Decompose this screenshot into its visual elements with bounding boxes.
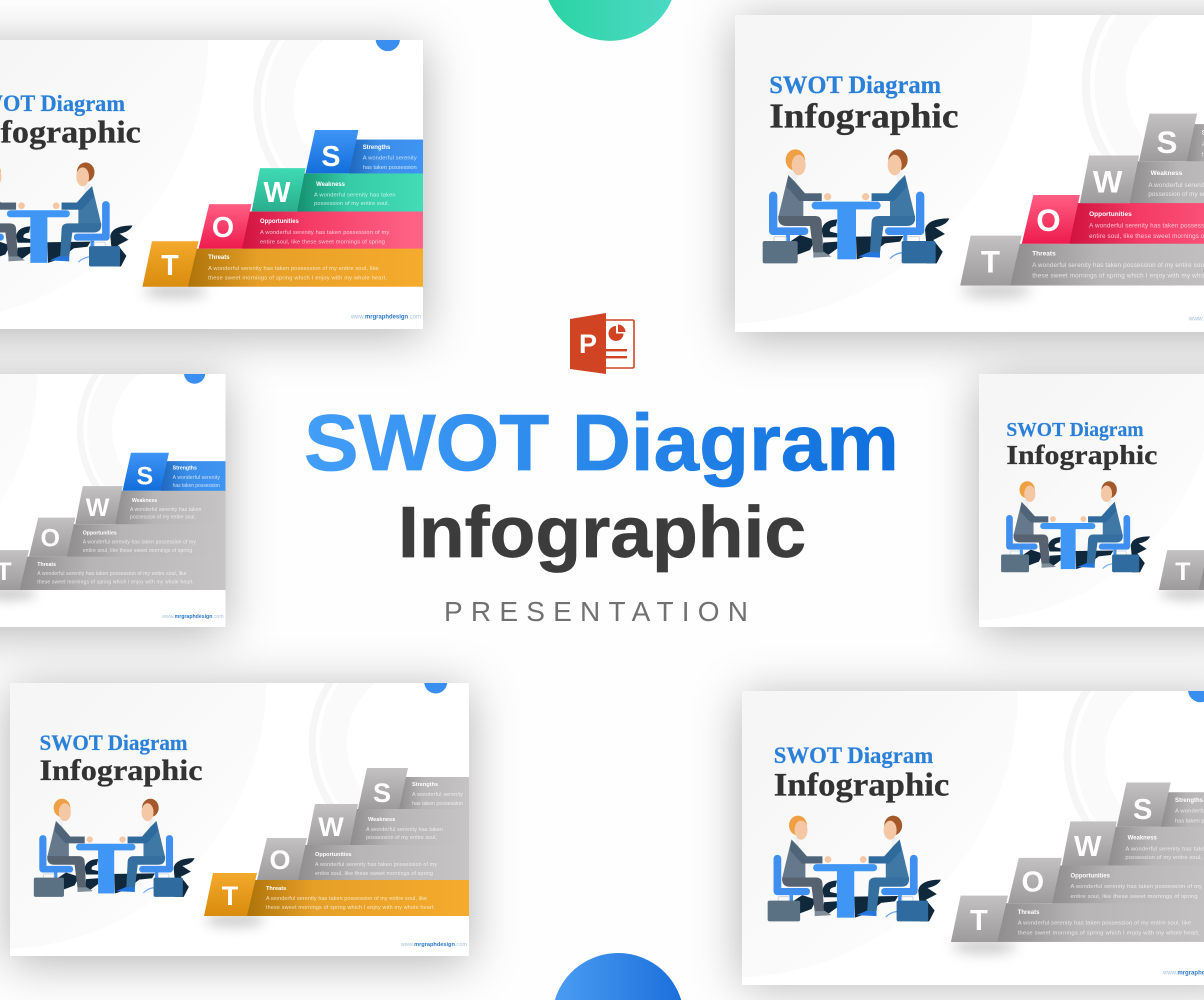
SWOT staircase: A wonderful serenity has taken possession of my [1070, 884, 1202, 890]
panel: slide middle right [979, 374, 1204, 627]
SWOT staircase: T [222, 881, 239, 911]
SWOT staircase: Threats [1032, 250, 1056, 257]
slide title [1006, 419, 1157, 471]
SWOT staircase: these sweet mornings of spring which I enjoy with my whole heart. [266, 905, 435, 911]
SWOT staircase: entire soul, like these sweet mornings of spring [83, 548, 192, 554]
website: www.mrgraphdesign.com [162, 614, 224, 620]
SWOT staircase: possession of my entire soul, [1125, 855, 1202, 861]
SWOT staircase: W [318, 812, 344, 842]
panel: slide bottom right, all grey [742, 691, 1204, 985]
SWOT staircase: A wonderful serenity [363, 156, 417, 162]
slide title: Infographic [1006, 440, 1157, 471]
slide title: Infographic [40, 754, 202, 787]
SWOT staircase [0, 453, 225, 590]
SWOT staircase: Threats [1018, 910, 1040, 916]
SWOT staircase: S [137, 462, 153, 490]
panel: slide middle left, strengths highlighted [0, 374, 226, 627]
SWOT staircase: has taken possession [363, 165, 417, 171]
SWOT staircase [142, 130, 423, 287]
icon: PowerPoint logo: P [579, 329, 597, 359]
SWOT staircase: Opportunities [260, 219, 300, 225]
tile shadow [1160, 587, 1204, 600]
decorative circle: top green [548, 0, 672, 41]
T tile [1159, 550, 1204, 590]
SWOT staircase: W [1093, 165, 1123, 200]
slide title [769, 70, 958, 136]
SWOT staircase: has taken possession [173, 483, 220, 489]
SWOT staircase: S [1156, 125, 1177, 160]
SWOT staircase [960, 114, 1204, 286]
SWOT staircase: W [1074, 831, 1102, 863]
SWOT staircase: A wonderful serenity has taken possession of my entire soul, like [37, 571, 187, 577]
SWOT staircase: these sweet mornings of spring which I enjoy with my whole heart. [37, 580, 194, 586]
SWOT staircase: possession of my entire soul, [130, 515, 196, 521]
website: www.mrgraphdesign.com [400, 942, 467, 948]
SWOT staircase: these sweet mornings of spring which I enjoy with my whole heart. [1018, 930, 1200, 936]
SWOT staircase: possession of my entire soul, [314, 201, 390, 207]
SWOT staircase: has taken possession [412, 801, 463, 807]
illustration: two people at a table [0, 163, 132, 267]
SWOT staircase: A wonderful serenity has taken [130, 507, 202, 513]
SWOT staircase [951, 783, 1204, 942]
subheading: PRESENTATION: PRESENTATION [444, 596, 748, 627]
slide title: Infographic [769, 97, 958, 136]
SWOT staircase: S [1133, 794, 1152, 826]
SWOT staircase: Threats [37, 562, 56, 568]
T tile: T [1175, 558, 1191, 586]
SWOT staircase: A wonderful serenity has taken [366, 827, 443, 833]
SWOT staircase: O [212, 212, 234, 244]
SWOT staircase: A wonderful serenity has taken possession of my [315, 862, 437, 868]
SWOT staircase: Weakness [316, 182, 346, 188]
SWOT staircase: O [269, 845, 291, 875]
icon: PowerPoint logo [570, 313, 634, 374]
SWOT staircase: A wonderful serenity has taken [314, 193, 396, 199]
slide title [774, 743, 949, 802]
heading: SWOT Diagram: SWOT Diagram [304, 398, 899, 487]
slide title: SWOT Diagram [1006, 419, 1144, 441]
heading: Infographic: Infographic [398, 493, 806, 573]
SWOT staircase: entire soul, like these sweet mornings of spring [260, 239, 385, 245]
SWOT staircase: Weakness [1128, 836, 1158, 842]
tile shadow [0, 587, 36, 600]
SWOT staircase: O [1021, 866, 1044, 898]
slide title: SWOT Diagram [769, 70, 941, 99]
SWOT staircase: Opportunities [1070, 873, 1111, 879]
illustration: two people at a table [768, 816, 941, 921]
panel: slide bottom left, threats highlighted [10, 683, 469, 956]
SWOT staircase: A wonderful serenity [173, 475, 220, 481]
website: www.mrgraphdesign.com [350, 315, 421, 321]
panel: slide top right, opportunities highlighted [735, 15, 1204, 332]
SWOT staircase: Strengths [173, 465, 197, 471]
SWOT staircase: Threats [208, 255, 230, 261]
SWOT staircase: Weakness [1151, 170, 1183, 177]
SWOT staircase: O [41, 524, 60, 552]
slide title: SWOT Diagram [774, 743, 933, 769]
illustration: two people at a table [1001, 481, 1150, 572]
SWOT staircase: A wonderful serenity has taken possession of my [260, 230, 389, 236]
tile shadow [961, 282, 1031, 298]
SWOT staircase: Opportunities [1089, 211, 1132, 218]
SWOT staircase: W [86, 494, 110, 522]
SWOT staircase: Weakness [132, 498, 157, 504]
SWOT staircase: A wonderful serenity has taken possession of my entire soul, like [1018, 921, 1191, 927]
tile shadow [205, 913, 265, 927]
SWOT staircase: entire soul, like these sweet mornings of spring [315, 871, 433, 877]
SWOT staircase: Strengths [1175, 798, 1204, 804]
SWOT staircase: these sweet mornings of spring which I enjoy with my whole heart. [208, 275, 387, 281]
slide title [40, 730, 202, 787]
SWOT staircase: Strengths [363, 145, 391, 151]
SWOT staircase: Strengths [412, 782, 438, 788]
SWOT staircase: A wonderful serenity [412, 792, 463, 798]
SWOT staircase: O [1036, 203, 1061, 238]
tile shadow [144, 284, 207, 298]
SWOT staircase: S [373, 778, 391, 808]
SWOT staircase: T [981, 245, 1000, 280]
SWOT staircase: Threats [266, 886, 286, 892]
SWOT staircase: Weakness [368, 817, 395, 823]
SWOT staircase: T [161, 250, 179, 282]
SWOT staircase: Opportunities [315, 852, 352, 858]
SWOT staircase: A wonderful serenity has taken possession of my entire soul, like [266, 896, 427, 902]
SWOT staircase: Opportunities [83, 530, 117, 536]
illustration: two people at a table [34, 799, 195, 897]
slide title [0, 91, 141, 150]
SWOT staircase: T [970, 905, 988, 937]
SWOT staircase: S [321, 141, 340, 173]
slide title: SWOT Diagram [40, 730, 188, 755]
slide title: Infographic [774, 766, 949, 802]
SWOT staircase: A wonderful serenity has taken possession of my [83, 540, 196, 546]
SWOT staircase: possession of my entire soul, [366, 835, 438, 841]
SWOT staircase: entire soul, like these sweet mornings of spring [1070, 894, 1198, 900]
SWOT staircase [204, 768, 469, 916]
illustration: two people at a table [763, 149, 949, 263]
decorative circle: bottom blue [555, 953, 681, 1000]
tile shadow [952, 939, 1017, 954]
SWOT staircase: W [263, 177, 290, 209]
SWOT staircase: A wonderful serenity has taken possession of my entire soul, like [208, 266, 379, 272]
panel: slide top left, all colours [0, 40, 423, 329]
